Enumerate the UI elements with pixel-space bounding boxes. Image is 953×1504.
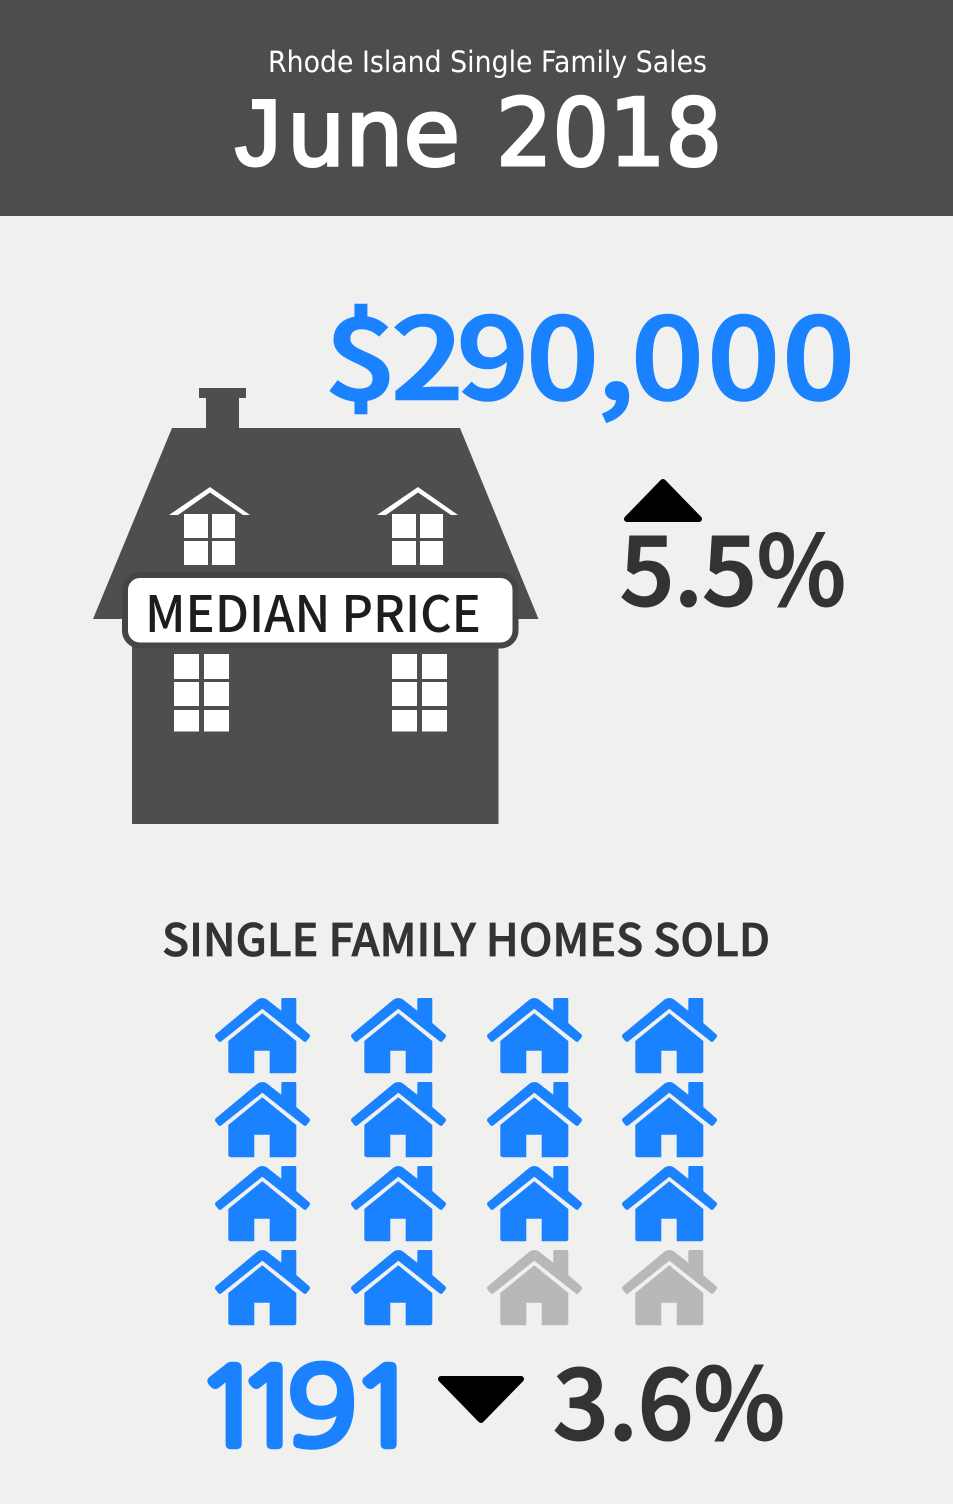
icon row 4, blue [215,1250,446,1325]
lower right window [392,654,447,732]
sales change percentage: 3.6% [553,1326,785,1468]
header band [0,0,953,216]
median price sign [125,575,516,647]
header title: 2018 [496,79,722,187]
section heading: SINGLE FAMILY HOMES SOLD [162,904,770,969]
sign label: MEDIAN PRICE [145,575,481,647]
icon: large house with median price sign [93,388,538,824]
arrow: sales down [441,1379,521,1420]
lower left window [174,654,229,732]
right dormer [377,487,458,565]
header title: J [235,80,281,185]
arrow: price up [627,482,699,519]
icon grid: homes sold [215,998,717,1325]
roof [93,428,538,619]
icon row 4, grey [487,1250,717,1325]
icon row 2 [215,1082,717,1157]
house body [132,610,498,824]
icon row 1 [215,998,717,1073]
header title: une [287,79,460,187]
header title [235,79,722,187]
median price value: $290,000 [325,270,855,432]
chimney [199,388,246,430]
price change percentage: 5.5% [620,494,846,633]
icon row 3 [215,1166,717,1241]
left dormer [169,487,250,565]
header subtitle: Rhode Island Single Family Sales [268,45,707,79]
homes sold count: 1191 [195,1355,420,1461]
